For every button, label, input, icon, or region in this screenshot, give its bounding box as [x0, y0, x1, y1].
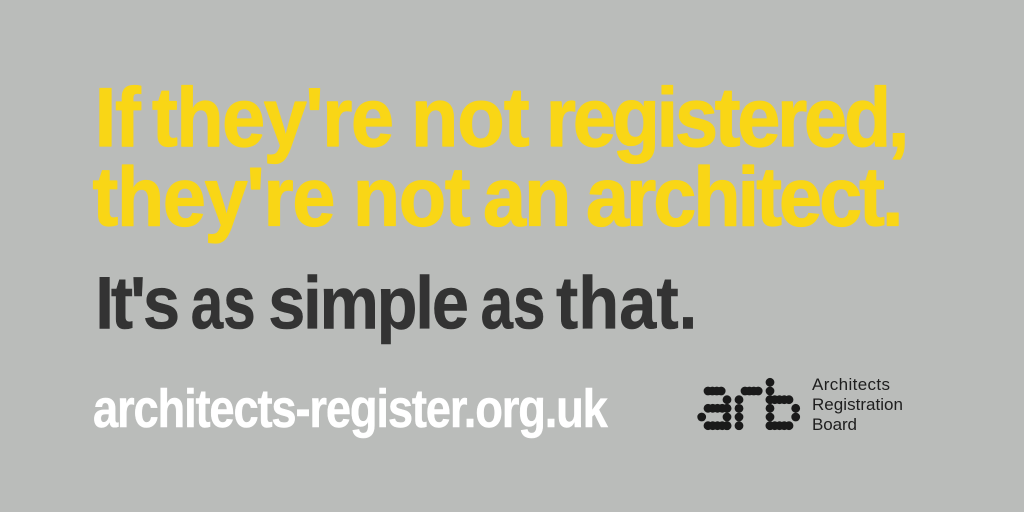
logo wordmark: Registration: [812, 395, 903, 414]
subheading: simple statement: simple: [268, 261, 469, 344]
title: yellow headline: [92, 71, 909, 244]
title: yellow headline: If: [95, 71, 142, 165]
subheading: simple statement: [95, 261, 697, 344]
website address: architects-register.org.uk: [93, 378, 608, 439]
subheading: simple statement: as: [481, 261, 545, 344]
title: yellow headline: not: [411, 71, 530, 165]
logo: Architects Registration Board: [702, 375, 903, 434]
logo wordmark: [812, 375, 903, 434]
icon: dotted arb monogram: [702, 382, 796, 426]
logo wordmark: Architects: [812, 375, 890, 394]
title: yellow headline: not: [353, 151, 471, 244]
title: yellow headline: they're: [152, 71, 394, 165]
title: yellow headline: registered,: [546, 71, 909, 165]
title: yellow headline: an: [483, 151, 571, 244]
subheading: simple statement: that.: [556, 261, 697, 344]
title: yellow headline: architect.: [586, 151, 903, 244]
subheading: simple statement: as: [191, 261, 256, 344]
subheading: simple statement: It's: [95, 261, 180, 344]
title: yellow headline: they're: [92, 151, 335, 244]
logo wordmark: Board: [812, 415, 857, 434]
